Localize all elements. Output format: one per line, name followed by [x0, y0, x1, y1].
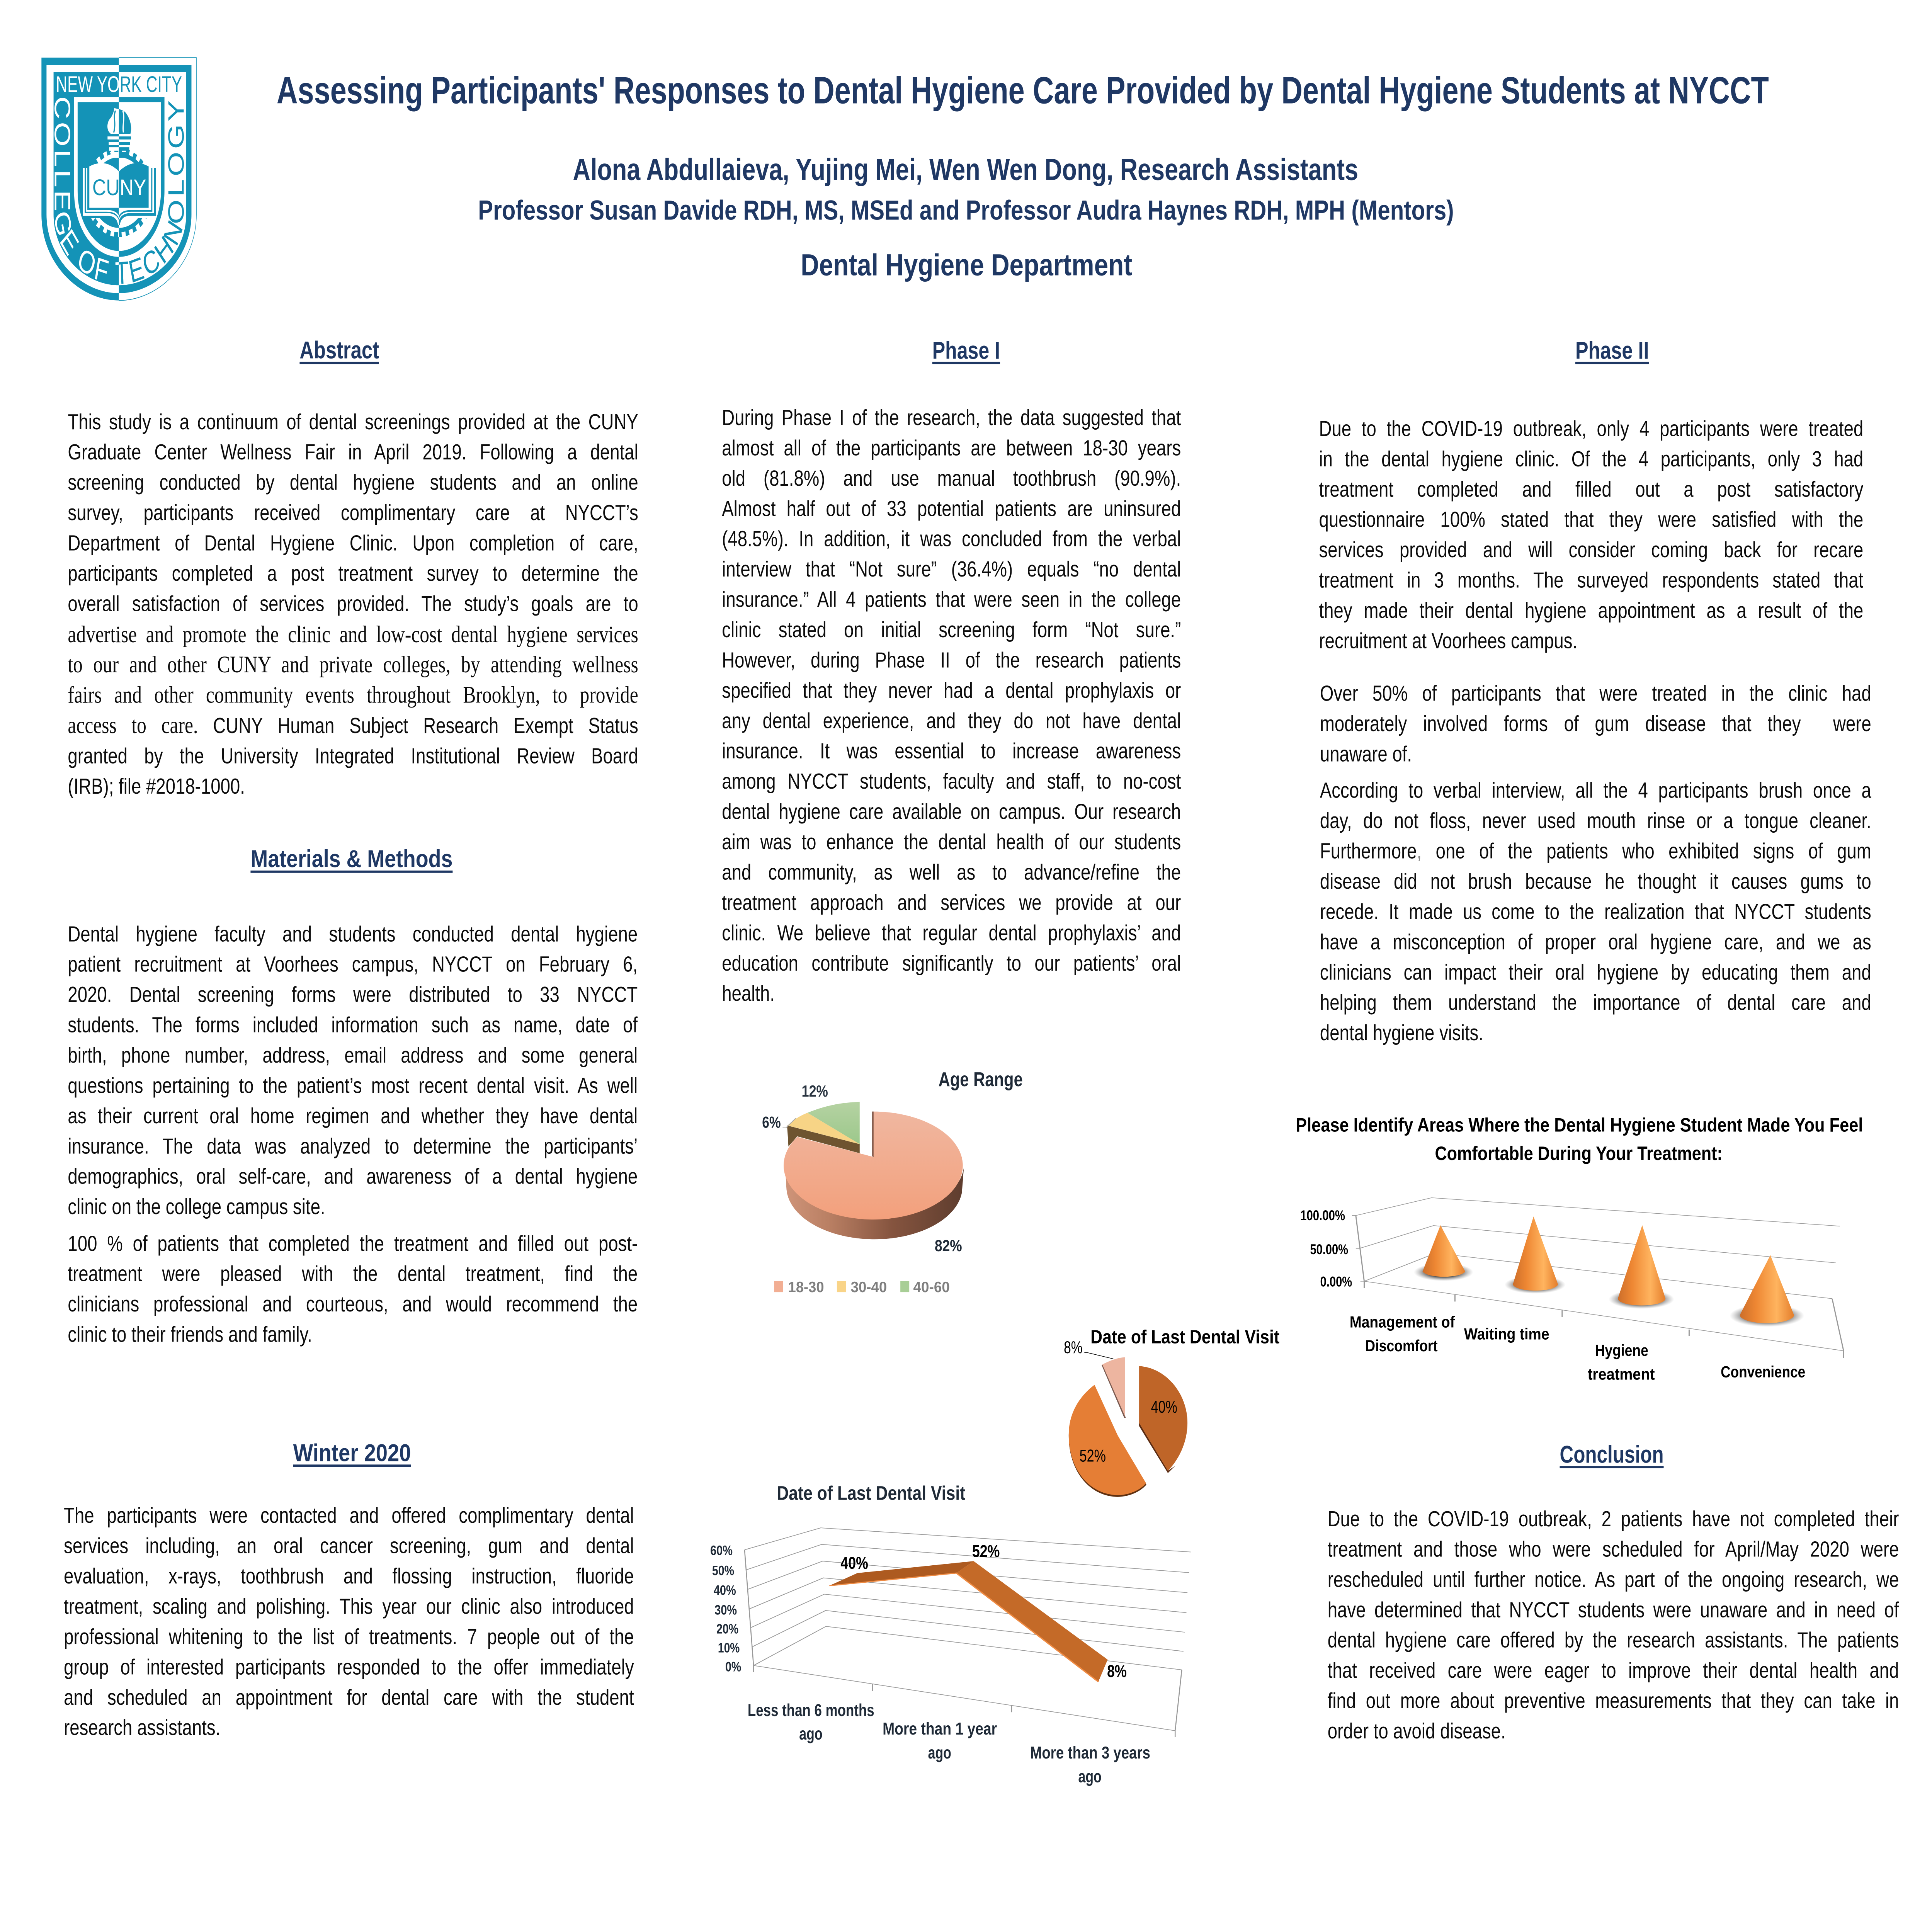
text: Materials & Methods paragraph 2: clinic to their friends and family. — [68, 1322, 312, 1347]
text: Materials & Methods paragraph 2: clinicians professional and courteous, and would recommend the — [68, 1292, 638, 1316]
text: Phase II paragraph 1 — [1319, 414, 1863, 656]
text: Abstract: to our and other CUNY and private colleges, by attending wellness — [68, 651, 638, 678]
text: Phase I: insurance. It was essential to increase awareness — [722, 739, 1181, 763]
category labels: More than 1 year — [883, 1719, 997, 1738]
text: Conclusion: find out more about preventive measurements that they can take in — [1328, 1689, 1899, 1713]
text: Phase I: specified that they never had a dental prophylaxis or — [722, 678, 1181, 703]
text: Conclusion: dental hygiene care offered by the research assistants. The patients — [1328, 1628, 1899, 1652]
text: Phase II paragraph 3: recede. It made us come to the realization that NYCCT students — [1320, 899, 1871, 924]
text: Materials & Methods paragraph 1: students. The forms included information such as name, date of — [68, 1013, 638, 1037]
text: Phase II paragraph 2 — [1320, 679, 1871, 769]
text: Conclusion — [1328, 1504, 1899, 1747]
text: Phase I: interview that “Not sure” (36.4%) equals “no dental — [722, 557, 1181, 582]
text: Abstract: advertise and promote the clinic and low-cost dental hygiene services — [68, 621, 638, 647]
text: Phase II paragraph 1: questionnaire 100% stated that they were satisfied with the — [1319, 507, 1863, 532]
text: Phase II paragraph 3 — [1320, 776, 1871, 1048]
heading: Abstract: Abstract — [299, 337, 379, 364]
chart title: Comfortable During Your Treatment: — [1435, 1143, 1723, 1164]
text: Phase II paragraph 2: unaware of. — [1320, 742, 1412, 766]
text: Phase II paragraph 2: Over 50% of participants that were treated in the clinic had — [1320, 681, 1871, 706]
legend: 18-30 — [788, 1279, 824, 1296]
text: Winter 2020: The participants were contacted and offered complimentary dental — [64, 1503, 634, 1528]
text: Conclusion: order to avoid disease. — [1328, 1719, 1506, 1743]
chart title: Date of Last Dental Visit — [1090, 1327, 1279, 1347]
text: Conclusion: Due to the COVID-19 outbreak, 2 patients have not completed their — [1328, 1507, 1899, 1531]
chart title — [1296, 1114, 1863, 1164]
text: Phase II paragraph 1: recruitment at Voorhees campus. — [1319, 628, 1577, 653]
text: Phase II paragraph 3: disease did not brush because he thought it causes gums to — [1320, 869, 1871, 894]
category labels: Convenience — [1721, 1363, 1805, 1381]
title: Assessing Participants' Responses to Dental Hygiene Care Provided by Dental Hygiene Students at NYCCT — [277, 69, 1769, 112]
category labels: More than 3 years — [1030, 1743, 1150, 1762]
category labels: Discomfort — [1365, 1337, 1438, 1355]
text: Phase I: (48.5%). In addition, it was concluded from the verbal — [722, 527, 1181, 551]
value labels: 8% — [1107, 1662, 1127, 1681]
category labels: ago — [928, 1743, 951, 1762]
text: Conclusion: have determined that NYCCT students were unaware and in need of — [1328, 1597, 1899, 1622]
text: Abstract: participants completed a post treatment survey to determine the — [68, 561, 638, 586]
text: Winter 2020: treatment, scaling and polishing. This year our clinic also introduced — [64, 1594, 634, 1619]
authors: research assistants: Alona Abdullaieva, Yujing Mei, Wen Wen Dong, Research Assistants — [573, 153, 1358, 187]
category labels: ago — [1078, 1767, 1102, 1786]
text: Phase I: Almost half out of 33 potential patients are uninsured — [722, 496, 1181, 521]
value labels: 52% — [972, 1542, 1000, 1561]
y axis labels — [1300, 1208, 1352, 1290]
heading: Phase II: Phase II — [1575, 337, 1649, 364]
heading: Phase I: Phase I — [932, 337, 1000, 364]
text: Materials & Methods paragraph 1: demographics, oral self-care, and awareness of a dental hygiene — [68, 1164, 638, 1189]
text: Winter 2020: professional whitening to the list of treatments. 7 people out of the — [64, 1624, 634, 1649]
text: Abstract: granted by the University Integrated Institutional Review Board — [68, 744, 638, 768]
value labels: 8% — [1064, 1338, 1083, 1357]
text: Materials & Methods paragraph 1: as their current oral home regimen and whether they have dental — [68, 1104, 638, 1128]
text: Phase II paragraph 1: treatment completed and filled out a post satisfactory — [1319, 477, 1863, 502]
text: Conclusion: rescheduled until further notice. As part of the ongoing research, we — [1328, 1567, 1899, 1592]
text: Winter 2020 — [64, 1500, 634, 1743]
text: Phase II paragraph 3: have a misconception of proper oral hygiene care, and we as — [1320, 930, 1871, 954]
text: Winter 2020: evaluation, x-rays, toothbrush and flossing instruction, fluoride — [64, 1564, 634, 1588]
y axis labels: 0.00% — [1320, 1274, 1352, 1290]
text: Phase II paragraph 1: they made their dental hygiene appointment as a result of the — [1319, 598, 1863, 623]
text: Materials & Methods paragraph 1: Dental hygiene faculty and students conducted dental hygiene — [68, 922, 638, 946]
text: Phase II paragraph 1: Due to the COVID-19 outbreak, only 4 participants were treated — [1319, 416, 1863, 441]
text: Phase II paragraph 3: day, do not floss, never used mouth rinse or a tongue cleaner. — [1320, 808, 1871, 833]
heading: Materials & Methods: Materials & Methods — [250, 845, 452, 872]
y axis labels: 10% — [718, 1640, 740, 1655]
text: Winter 2020: and scheduled an appointment for dental care with the student — [64, 1685, 634, 1710]
department: Dental Hygiene Department — [801, 248, 1132, 282]
text: Abstract: screening conducted by dental hygiene students and an online — [68, 470, 638, 495]
text: Abstract: Department of Dental Hygiene Clinic. Upon completion of care, — [68, 531, 638, 555]
text: Phase I: education contribute significantly to our patients’ oral — [722, 951, 1181, 976]
text: Phase II paragraph 2: moderately involved forms of gum disease that they were — [1320, 711, 1871, 736]
text: Phase II paragraph 3: clinicians can impact their oral hygiene by educating them and — [1320, 960, 1871, 985]
text: Phase I — [722, 403, 1181, 1009]
category labels: treatment — [1588, 1365, 1655, 1383]
chart: comfort during treatment 3D cones — [1296, 1114, 1863, 1383]
category labels: Waiting time — [1464, 1325, 1549, 1344]
text: Materials & Methods paragraph 2: 100 % of patients that completed the treatment and filled out post- — [68, 1231, 638, 1256]
text: Phase II paragraph 3: Furthermore, one of the patients who exhibited signs of gum — [1320, 839, 1871, 863]
category labels: Management of — [1350, 1313, 1455, 1331]
text: Materials & Methods paragraph 1 — [68, 919, 638, 1222]
logo: New York City College of Technology crest: COLLEGE OF TECHNOLOGY — [49, 96, 189, 291]
value labels: 82% — [935, 1237, 962, 1255]
category labels: Less than 6 months — [748, 1701, 874, 1720]
value labels: 12% — [802, 1082, 828, 1100]
text: Phase I: dental hygiene care available on campus. Our research — [722, 799, 1181, 824]
y axis labels: 50.00% — [1310, 1242, 1348, 1258]
heading: Winter 2020: Winter 2020 — [293, 1439, 411, 1467]
text: Phase I: among NYCCT students, faculty and staff, to no-cost — [722, 769, 1181, 794]
text: Winter 2020: research assistants. — [64, 1715, 220, 1740]
text: Abstract: (IRB); file #2018-1000. — [68, 774, 245, 799]
text: Phase I: and community, as well as to advance/refine the — [722, 860, 1181, 884]
text: Phase I: However, during Phase II of the research patients — [722, 648, 1181, 672]
value labels: 6% — [762, 1113, 781, 1132]
text: Abstract: access to care. CUNY Human Subject Research Exempt Status — [68, 712, 638, 738]
category labels — [748, 1701, 1150, 1786]
text: Materials & Methods paragraph 1: clinic on the college campus site. — [68, 1194, 325, 1219]
chart: Date of Last Dental Visit 3D line — [710, 1482, 1191, 1786]
category labels: ago — [799, 1724, 823, 1743]
value labels: 40% — [1151, 1397, 1177, 1417]
text: Abstract — [68, 407, 638, 801]
y axis labels: 40% — [714, 1583, 736, 1598]
text: Materials & Methods paragraph 1: patient recruitment at Voorhees campus, NYCCT on February 6, — [68, 952, 638, 976]
chart title: Age Range: Age Range — [939, 1068, 1023, 1091]
chart title: Please Identify Areas Where the Dental Hygiene Student Made You Feel — [1296, 1114, 1863, 1136]
y axis labels: 0% — [725, 1659, 741, 1674]
value labels — [1064, 1338, 1177, 1465]
text: Materials & Methods paragraph 1: insurance. The data was analyzed to determine the participants’ — [68, 1134, 638, 1158]
text: Phase I: almost all of the participants are between 18-30 years — [722, 435, 1181, 460]
y axis labels: 20% — [716, 1621, 738, 1636]
y axis labels: 100.00% — [1300, 1208, 1345, 1224]
logo: New York City College of Technology crest: NEW YORK CITY — [56, 72, 182, 97]
category labels: Hygiene — [1595, 1341, 1648, 1360]
legend: 40-60 — [913, 1279, 950, 1296]
chart title: Date of Last Dental Visit — [777, 1482, 965, 1504]
legend — [774, 1279, 950, 1296]
text: Phase I: clinic stated on initial screening form “Not sure.” — [722, 617, 1181, 642]
text: Abstract: survey, participants received complimentary care at NYCCT’s — [68, 500, 638, 525]
text: Phase I: any dental experience, and they do not have dental — [722, 708, 1181, 733]
text: Abstract: overall satisfaction of services provided. The study’s goals are to — [68, 591, 638, 616]
value labels: 40% — [840, 1553, 868, 1573]
text: Phase I: health. — [722, 981, 775, 1006]
text: Phase I: During Phase I of the research, the data suggested that — [722, 405, 1181, 430]
authors: mentors: Professor Susan Davide RDH, MS, MSEd and Professor Audra Haynes RDH, MPH (Mentors) — [478, 195, 1454, 226]
text: Phase II paragraph 3: According to verbal interview, all the 4 participants brush once a — [1320, 778, 1871, 803]
text: Phase II paragraph 3: dental hygiene visits. — [1320, 1020, 1483, 1045]
chart: Date of Last Dental Visit exploded pie — [1064, 1327, 1279, 1497]
text: Abstract: This study is a continuum of dental screenings provided at the CUNY — [68, 410, 638, 434]
logo: New York City College of Technology crest: CUNY — [92, 175, 146, 200]
text: Phase II paragraph 1: services provided and will consider coming back for recare — [1319, 537, 1863, 562]
text: Materials & Methods paragraph 1: questions pertaining to the patient’s most recent dental visit. As well — [68, 1073, 638, 1098]
y axis labels: 60% — [710, 1543, 733, 1558]
value labels — [762, 1082, 962, 1255]
logo: New York City College of Technology crest: NEW YORK CITY — [56, 72, 182, 97]
text: Conclusion: that received care were eager to improve their dental health and — [1328, 1658, 1899, 1683]
text: Abstract: fairs and other community events throughout Brooklyn, to provide — [68, 682, 638, 708]
text: Materials & Methods paragraph 2 — [68, 1228, 638, 1350]
value labels — [840, 1542, 1127, 1681]
y axis labels — [710, 1543, 741, 1674]
heading: Conclusion: Conclusion — [1560, 1441, 1664, 1468]
text: Abstract: Graduate Center Wellness Fair in April 2019. Following a dental — [68, 440, 638, 464]
text: Phase I: treatment approach and services we provide at our — [722, 890, 1181, 915]
text: Materials & Methods paragraph 1: 2020. Dental screening forms were distributed to 33 NYCCT — [68, 982, 638, 1007]
text: Phase I: old (81.8%) and use manual toothbrush (90.9%). — [722, 466, 1181, 491]
text: Winter 2020: group of interested participants responded to the offer immediately — [64, 1655, 634, 1679]
y axis labels: 50% — [712, 1563, 734, 1578]
text: Materials & Methods paragraph 2: treatment were pleased with the dental treatment, find the — [68, 1262, 638, 1286]
text: Conclusion: treatment and those who were scheduled for April/May 2020 were — [1328, 1537, 1899, 1561]
logo: New York City College of Technology crest: CUNY — [92, 175, 146, 200]
text: Phase II paragraph 1: treatment in 3 months. The surveyed respondents stated that — [1319, 568, 1863, 592]
value labels: 52% — [1080, 1446, 1106, 1465]
category labels — [1350, 1313, 1805, 1383]
text: Phase II paragraph 1: in the dental hygiene clinic. Of the 4 participants, only 3 had — [1319, 447, 1863, 471]
logo: New York City College of Technology crest: COLLEGE OF TECHNOLOGY — [49, 96, 189, 291]
text: Materials & Methods paragraph 1: birth, phone number, address, email address and some general — [68, 1043, 638, 1068]
text: Winter 2020: services including, an oral cancer screening, gum and dental — [64, 1534, 634, 1558]
text: Phase I: aim was to enhance the dental health of our students — [722, 830, 1181, 854]
text: Phase II paragraph 3: helping them understand the importance of dental care and — [1320, 990, 1871, 1015]
text: Phase I: insurance.” All 4 patients that were seen in the college — [722, 587, 1181, 612]
y axis labels: 30% — [714, 1602, 737, 1617]
text: Phase I: clinic. We believe that regular dental prophylaxis’ and — [722, 920, 1181, 945]
legend: 30-40 — [851, 1279, 887, 1296]
chart: Age Range 3D pie — [762, 1068, 1023, 1296]
